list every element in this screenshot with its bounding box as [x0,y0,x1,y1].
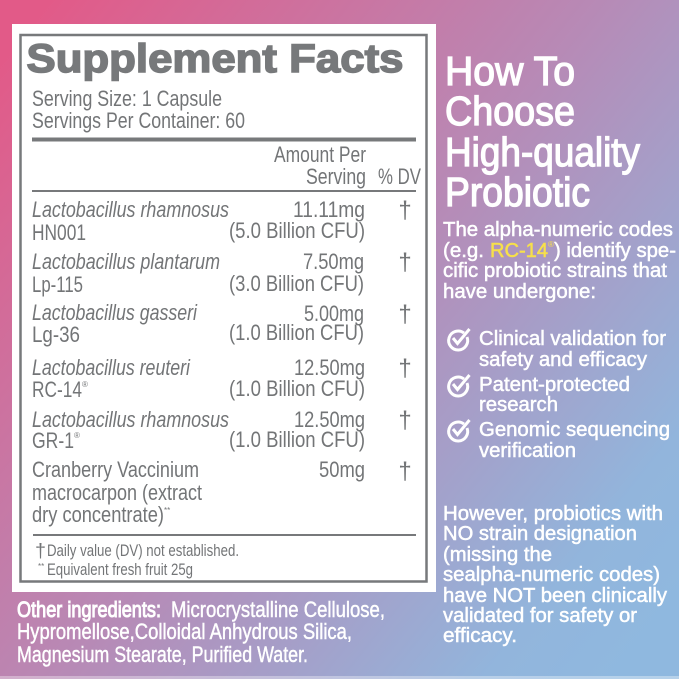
row: Lactobacillus rhamnosus GR-1 [32,407,412,453]
row: Lactobacillus rhamnosus HN001: (5.0 Billion CFU) [229,218,365,243]
row: Lactobacillus plantarum Lp-115: Lactobacillus plantarum [32,249,220,274]
row: Lactobacillus rhamnosus GR-1: Lactobacillus rhamnosus [32,407,229,432]
row: Cranberry extract: dry concentrate) [32,502,164,527]
row: Lactobacillus plantarum Lp-115 [32,249,412,297]
row: Lactobacillus gasseri Lg-36: 5.00mg [304,301,364,326]
item: patent-protected research [479,374,630,416]
title: how to choose high-quality probiotic: Choose [445,88,575,134]
checklist [449,328,670,462]
panel: supplement facts [12,24,436,592]
row: Lactobacillus plantarum Lp-115: (3.0 Billion CFU) [229,271,364,296]
intro text: have undergone: [443,281,596,303]
row: Cranberry extract: macrocarpon (extract [32,480,203,505]
title: how to choose high-quality probiotic: How To [445,48,575,94]
serving information: Serving Size: 1 Capsule [32,86,222,111]
row: Lactobacillus rhamnosus GR-1: ® [74,431,80,440]
heading: supplement facts: Supplement Facts [26,37,404,81]
row: Lactobacillus reuteri RC-14: † [398,355,412,382]
intro text: The alpha-numeric codes [443,219,673,241]
warning text [443,503,667,647]
other ingredients: Hypromellose,Colloidal Anhydrous Silica, [17,619,352,644]
column headers: Amount Per [274,142,366,167]
warning text: validated for safety or [443,605,637,627]
warning text: However, probiotics with [443,503,663,525]
footnotes: ** [38,562,44,571]
row: Lactobacillus gasseri Lg-36: † [398,301,412,328]
footnotes: Equivalent fresh fruit 25g [47,561,193,579]
row: Lactobacillus reuteri RC-14: RC-14 [32,377,82,402]
intro text: cific probiotic strains that [443,260,667,282]
column headers: Serving [306,164,366,189]
row: Lactobacillus plantarum Lp-115: † [398,249,412,276]
icon: check 1 [449,329,470,350]
row: Cranberry extract: ** [164,506,170,515]
intro text: (e.g. [443,240,484,262]
item: patent-protected research: research [479,394,558,416]
other ingredients: Magnesium Stearate, Purified Water. [17,642,308,667]
item: genomic sequencing: verification [479,440,576,462]
row: Lactobacillus plantarum Lp-115: 7.50mg [303,249,364,274]
footnotes [35,541,239,579]
intro text: ) identify spe- [554,240,676,262]
row: Lactobacillus plantarum Lp-115: Lp-115 [32,272,83,297]
intro text [443,219,676,303]
icon: check 3 [449,420,470,441]
row: Lactobacillus rhamnosus HN001: HN001 [32,220,86,245]
footnotes: Daily value (DV) not established. [47,542,239,560]
row: Lactobacillus rhamnosus HN001: Lactobacillus rhamnosus [32,197,229,222]
row: Lactobacillus rhamnosus GR-1: GR-1 [32,428,74,453]
row: Lactobacillus rhamnosus GR-1: (1.0 Billion CFU) [229,427,365,452]
warning text: NO strain designation [443,523,637,545]
row: Lactobacillus rhamnosus HN001 [32,197,412,245]
row: Cranberry extract: Cranberry Vaccinium [32,457,199,482]
row: Lactobacillus gasseri Lg-36: (1.0 Billion CFU) [229,320,364,345]
warning text: (missing the [443,544,552,566]
item: clinical validation: safety and efficacy [479,349,647,371]
warning text: efficacy. [443,625,517,647]
row: Lactobacillus reuteri RC-14: (1.0 Billion CFU) [229,376,365,401]
row: Lactobacillus reuteri RC-14: ® [82,380,88,389]
other ingredients [17,597,385,667]
row: Lactobacillus reuteri RC-14 [32,355,412,402]
column headers [274,142,421,189]
row: Lactobacillus gasseri Lg-36: Lg-36 [32,322,80,347]
title: how to choose high-quality probiotic [445,48,640,215]
row: Lactobacillus gasseri Lg-36: Lactobacillus gasseri [32,300,198,325]
item: clinical validation: Clinical validation for [479,328,666,350]
warning text: have NOT been clinically [443,585,667,607]
footnotes: † [35,541,46,562]
title: how to choose high-quality probiotic: Probiotic [445,169,590,215]
item: patent-protected research: Patent-protected [479,374,630,396]
serving information: Servings Per Container: 60 [32,108,245,133]
row: Cranberry extract [32,457,412,527]
row: Lactobacillus gasseri Lg-36 [32,300,412,347]
serving information [32,86,245,133]
title: how to choose high-quality probiotic: High-quality [445,129,640,175]
item: genomic sequencing [479,419,670,462]
row: Lactobacillus reuteri RC-14: Lactobacillus reuteri [32,355,191,380]
other ingredients: Other ingredients: [17,597,161,622]
other ingredients: Microcrystalline Cellulose, [171,597,385,622]
item: clinical validation [479,328,666,371]
icon: check 2 [449,375,470,396]
row: Lactobacillus rhamnosus GR-1: 12.50mg [294,407,365,432]
warning text: sealpha-numeric codes) [443,564,660,586]
intro text: ® [548,240,554,249]
row: Lactobacillus reuteri RC-14: 12.50mg [294,355,365,380]
panel border [20,35,426,582]
panel background [12,24,436,592]
row: Cranberry extract: † [398,458,412,485]
column headers: % DV [378,164,421,189]
item: genomic sequencing: Genomic sequencing [479,419,670,441]
intro text: RC-14 [490,240,548,262]
row: Lactobacillus rhamnosus HN001: 11.11mg [293,197,365,222]
row: Lactobacillus rhamnosus GR-1: † [398,407,412,434]
row: Cranberry extract: 50mg [319,457,365,482]
row: Lactobacillus rhamnosus HN001: † [398,197,412,224]
